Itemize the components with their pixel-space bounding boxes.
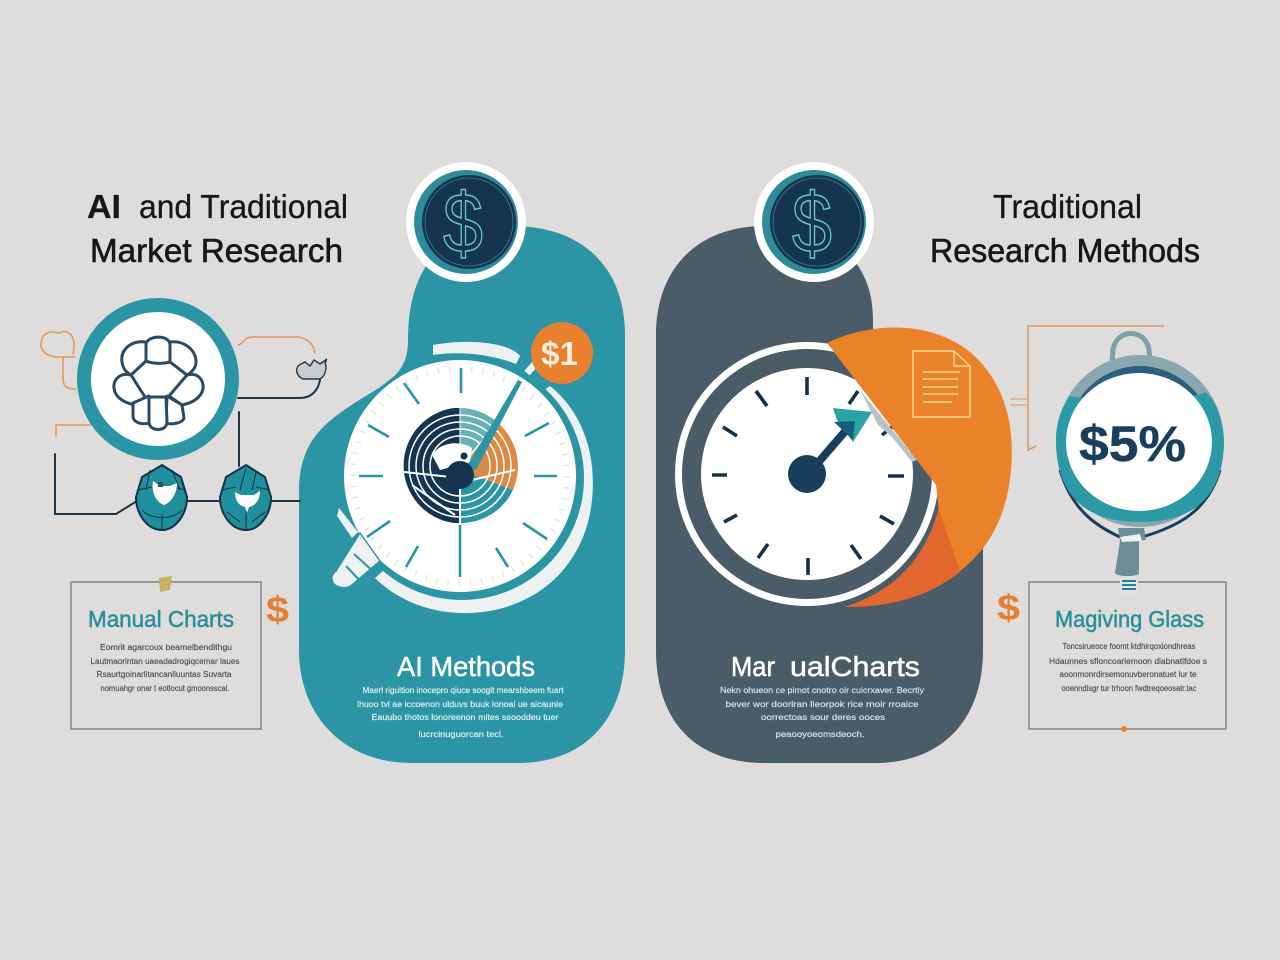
body text <box>1049 642 1207 693</box>
chart: AI stopwatch <box>332 322 593 613</box>
arrowhead <box>833 408 872 442</box>
shadow on face <box>860 390 917 462</box>
outer white rim <box>375 386 593 613</box>
text: Manual Charts on slate: Mar <box>731 651 775 682</box>
hour ticks <box>712 377 904 575</box>
top loop <box>1112 334 1150 362</box>
heading: Manual Charts <box>88 606 234 632</box>
panel: traditional methods slate background <box>656 226 983 763</box>
icon: orange dollar right: $ <box>997 587 1020 628</box>
slate ring <box>682 349 932 599</box>
title: Traditional Research Methods: Research Methods <box>930 232 1200 269</box>
lower cord <box>1060 470 1220 537</box>
text: AI Methods <box>357 651 564 739</box>
body text: Eomrit agarcoux beamelbendithgu <box>100 643 232 652</box>
icon: small chip <box>1120 578 1138 595</box>
outer lens body <box>1056 355 1224 527</box>
body text: Lautmaorintan uaeadadrogiqcemar laues <box>90 657 240 666</box>
text: Manual Charts on slate: peaooyoeomsdeoch. <box>776 730 864 739</box>
icon: orange dollar left: $ <box>266 589 289 630</box>
text: AI Methods: Eauubo thotos lonoreenon mites seooddeu tuer <box>372 713 559 722</box>
text: Manual Charts on slate: bever wor dooriran lieorpok rice rnoir rroaice <box>726 700 919 709</box>
body text: ooenndisgr tur trhoon fwdtreqoeosatr.tac <box>1062 684 1196 693</box>
text: Manual Charts on slate: oorrectoas sour deres ooces <box>761 713 885 722</box>
text: AI Methods: lucrcinuguorcan tecl. <box>418 730 504 739</box>
text box: Manual Charts <box>71 576 261 729</box>
white rim <box>675 342 939 606</box>
panel: AI methods teal background <box>299 226 625 763</box>
title: Traditional Research Methods: Traditional <box>993 188 1142 225</box>
text box: Magnifying Glass <box>1029 578 1226 732</box>
hub <box>788 455 826 493</box>
circuit dial <box>404 408 518 525</box>
icon: dollar coin traditional <box>754 162 874 282</box>
body text <box>90 643 240 693</box>
hub <box>446 461 474 489</box>
icon: dollar coin traditional: $ <box>792 176 832 270</box>
title: AI and Traditional Market Research: Market Research <box>90 232 343 269</box>
icon: dollar coin AI: $ <box>443 176 483 270</box>
icon: dollar coin AI <box>406 162 526 282</box>
text: AI Methods: Maerl rigultion inocepro qiuce soogit mearshbeem fuart <box>362 686 564 695</box>
minute ticks <box>353 369 567 583</box>
chart: traditional clock <box>675 342 939 606</box>
body text: aoonmonrdirsemonuvberonatuet lur te <box>1060 670 1197 679</box>
crown connector <box>527 363 536 373</box>
connector lines: left diagram <box>41 332 320 514</box>
hand <box>467 380 522 470</box>
text: Manual Charts on slate <box>720 651 924 739</box>
title: AI and Traditional Market Research: AI <box>87 188 121 225</box>
icon: shield right <box>220 465 271 530</box>
inner rim navy <box>1066 366 1214 442</box>
body text: Hdaunnes sfloncoariemoon dlabnatlfdoe s <box>1049 657 1207 666</box>
title: Traditional Research Methods <box>930 188 1200 269</box>
chart: AI stopwatch: $1 <box>541 335 578 372</box>
white lens <box>1066 373 1212 511</box>
text: Manual Charts on slate: ualCharts <box>790 651 920 682</box>
text: AI Methods: lhuoo tvi ae iccoenon ulduvs buuk lonoai ue aicaunie <box>357 700 564 709</box>
white face <box>344 360 576 592</box>
heading: Magiving Glass <box>1055 606 1204 632</box>
orange dot <box>1121 726 1127 732</box>
handle <box>1115 528 1146 576</box>
icon: magnifying glass <box>1056 334 1224 576</box>
body text: Toncsirueoce foomt ktdhirqoxiondhreas <box>1062 642 1196 651</box>
icon: small cloud node <box>297 359 327 379</box>
icon: shield left <box>136 465 187 530</box>
body text: Rsaurtgoinarlitancanlluuntas Suvarta <box>96 670 232 679</box>
icon: brain circle <box>77 298 239 460</box>
document icon <box>913 351 970 417</box>
title: AI and Traditional Market Research <box>87 188 348 269</box>
teal ring <box>340 356 584 600</box>
text: Manual Charts on slate: Nekn ohueon ce pimot cnotro oir cuicrxaver. Becrtiy <box>720 686 924 695</box>
title: AI and Traditional Market Research: and Traditional <box>139 188 348 225</box>
lower-left clamp <box>337 508 358 538</box>
hour ticks <box>359 368 557 577</box>
icon: note pin <box>159 576 172 592</box>
orange badge <box>531 322 593 384</box>
inner rim teal <box>1056 392 1224 522</box>
white face <box>701 368 913 580</box>
hand <box>810 428 848 472</box>
chart: orange pie <box>827 328 1012 607</box>
text: AI Methods: AI Methods <box>397 651 535 682</box>
body text: nomuahgr onar t eotlocut gmoonsscal. <box>100 684 230 693</box>
lens value: $5% <box>1079 416 1186 472</box>
connector lines: right diagram <box>1010 326 1164 450</box>
